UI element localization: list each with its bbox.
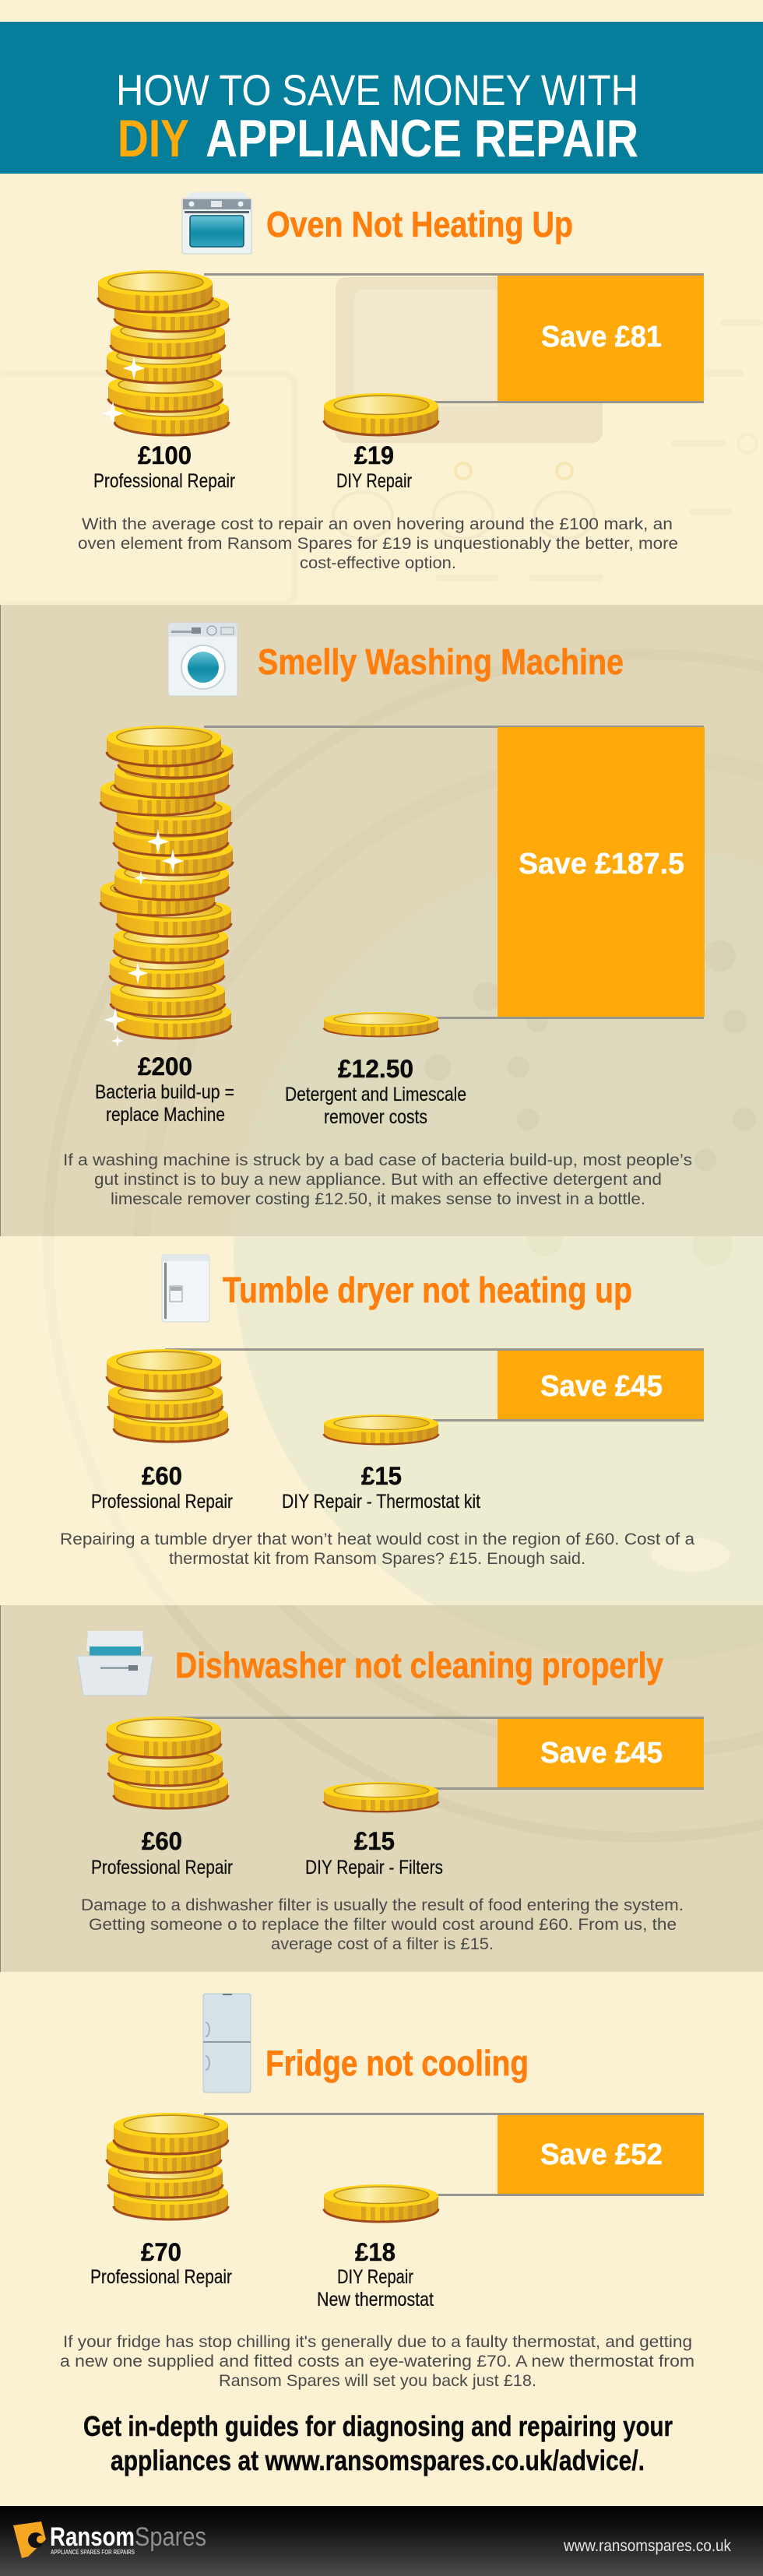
label: DIY new thermostat: DIY Repair [337,2266,413,2288]
label: DIY new thermostat: New thermostat [317,2289,434,2311]
panel: smelly washing machine [63,623,705,1208]
label: DIY filters: DIY Repair - Filters [305,1857,443,1878]
savings chart [98,270,704,435]
label: professional: Professional Repair [90,2266,232,2288]
coin stack: professional [107,2113,228,2219]
body text [60,2333,694,2390]
savings bar [498,727,705,1017]
label: DIY new thermostat [317,2266,434,2311]
icon: dishwasher [77,1631,153,1696]
coin: DIY [324,393,438,435]
label: DIY thermostat kit: DIY Repair - Thermostat kit [282,1491,480,1513]
savings bar: Save £81 [541,321,662,353]
savings bar [498,2115,704,2194]
icon: washing machine [168,623,237,696]
savings bar: Save £187.5 [519,848,684,880]
label: detergent price: £12.50 [338,1055,413,1083]
heading: Tumble dryer not heating up [223,1270,632,1310]
body text: Damage to a dishwasher filter is usually the result of food entering the system. [81,1896,684,1914]
label: DIY price: £15 [361,1462,402,1490]
logo: Ransom Spares: APPLIANCE SPARES FOR REPAIRS [51,2549,135,2556]
label: detergent: remover costs [324,1106,427,1128]
label: DIY: DIY Repair [336,470,412,492]
coin stack: professional [107,1349,228,1442]
label: professional price: £100 [138,441,192,469]
oven background illustration [0,277,763,604]
label: detergent [285,1084,466,1128]
logo: Ransom Spares: Ransom [50,2522,135,2552]
body text [60,1530,694,1568]
savings bar: Save £45 [540,1737,663,1769]
coin stack: professional [107,1717,228,1808]
body text [81,1896,684,1953]
savings chart [107,2113,704,2222]
body text: oven element from Ransom Spares for £19 is unquestionably the better, more [78,535,678,553]
savings bar: Save £45 [540,1370,663,1403]
panel: oven not heating up [78,192,704,572]
label: replace price: £200 [138,1053,192,1081]
call to action: appliances at www.ransomspares.co.uk/advice/. [111,2444,645,2476]
logo: Ransom Spares [13,2522,206,2558]
panel: dishwasher not cleaning properly [77,1631,704,1953]
label: professional: Professional Repair [91,1857,233,1878]
savings bar: Save £52 [540,2138,663,2171]
website url: www.ransomspares.co.uk [563,2537,731,2555]
body text: Repairing a tumble dryer that won’t heat would cost in the region of £60. Cost of a [60,1530,694,1548]
coin: DIY [324,1415,438,1444]
label: professional: Professional Repair [91,1491,233,1513]
label: detergent: Detergent and Limescale [285,1084,466,1105]
label: replace machine: Bacteria build-up = [95,1081,234,1103]
heading: Oven Not Heating Up [266,204,573,244]
footer [0,2506,763,2576]
savings chart [100,726,705,1047]
savings bar [498,276,704,401]
body text: gut instinct is to buy a new appliance. But with an effective detergent and [94,1171,662,1189]
heading: Smelly Washing Machine [258,641,624,682]
body text: If your fridge has stop chilling it's generally due to a faulty thermostat, and getting [63,2333,692,2351]
body text [63,1151,692,1208]
body text: If a washing machine is struck by a bad case of bacteria build-up, most people’s [63,1151,692,1169]
savings chart [107,1717,704,1812]
label: professional price: £60 [142,1827,182,1855]
savings bar [498,1351,704,1419]
label: DIY price: £15 [354,1827,395,1855]
body text: With the average cost to repair an oven hovering around the £100 mark, an [82,515,673,533]
heading: Fridge not cooling [265,2043,529,2083]
savings bar [498,1719,704,1787]
savings chart [107,1348,704,1444]
label: replace machine: replace Machine [106,1104,225,1126]
coin stack: professional [98,270,229,435]
label: DIY price: £18 [355,2238,396,2266]
heading: Dishwasher not cleaning properly [175,1645,663,1685]
coin: detergent [324,1012,438,1036]
icon: oven [182,192,251,254]
washing machine drum background [164,940,763,1843]
label: replace machine [95,1081,234,1126]
panel: fridge not cooling [60,1994,704,2390]
title banner [0,22,763,174]
title line 2: DIY [118,109,189,168]
panel: tumble dryer not heating up [60,1255,704,1568]
logo: Ransom Spares: Spares [135,2522,206,2552]
coin stack: replace machine [100,726,233,1047]
label: DIY price: £19 [354,441,394,469]
label: professional price: £60 [142,1462,182,1490]
body text: a new one supplied and fitted costs an eye-watering £70. A new thermostat from [60,2353,694,2370]
body text: cost-effective option. [300,554,456,572]
coin: DIY [324,1782,438,1812]
coin: DIY [324,2184,438,2222]
body text: average cost of a filter is £15. [271,1935,494,1953]
body text [78,515,678,572]
section background bands [0,605,763,1972]
body text: limescale remover costing £12.50, it makes sense to invest in a bottle. [111,1190,645,1208]
title line 1: HOW TO SAVE MONEY WITH [116,65,638,114]
body text: thermostat kit from Ransom Spares? £15. Enough said. [169,1550,585,1568]
body text: Getting someone o to replace the filter would cost around £60. From us, the [89,1916,677,1934]
icon: tumble dryer [162,1255,209,1322]
body text: Ransom Spares will set you back just £18. [219,2372,536,2390]
call to action [83,2410,673,2476]
label: professional: Professional Repair [93,470,235,492]
title line 2 continued: APPLIANCE REPAIR [206,109,638,168]
icon: fridge [203,1994,251,2093]
label: professional price: £70 [141,2238,181,2266]
